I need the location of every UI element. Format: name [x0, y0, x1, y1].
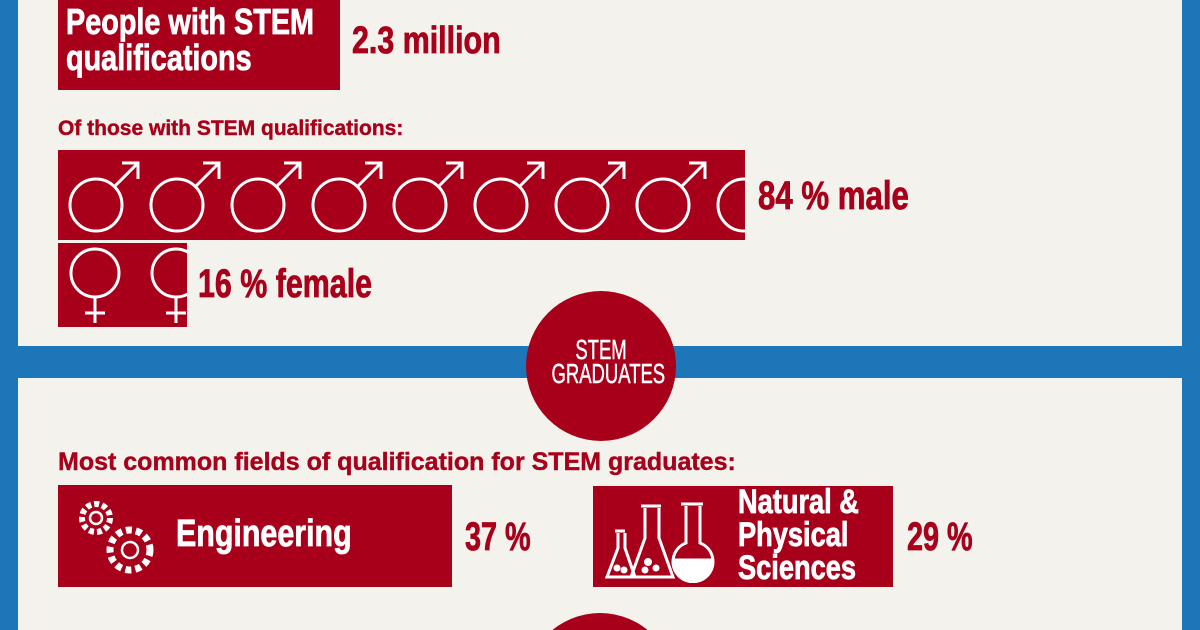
- icon: gears: [79, 501, 154, 574]
- box: people with STEM: qualifications: [66, 37, 252, 78]
- box: engineering: [58, 485, 452, 587]
- box: natural & physical sciences: Natural &: [738, 483, 859, 521]
- icon: flasks: [604, 502, 714, 583]
- badge: bottom circle: [552, 613, 648, 630]
- box: people with STEM: [58, 0, 340, 90]
- stat: 37%: 37 %: [465, 515, 531, 559]
- panel: top: [18, 0, 1182, 346]
- subheading: most common fields: Most common fields of qualification for STEM graduates:: [58, 448, 736, 476]
- badge: STEM graduates: [526, 291, 676, 441]
- subheading: of those: Of those with STEM qualifications:: [58, 117, 403, 140]
- stat: 84% male: 84 % male: [758, 174, 909, 218]
- box: natural & physical sciences: Physical: [738, 516, 848, 554]
- box: natural & physical sciences: Sciences: [738, 549, 856, 587]
- chart: male bar: [58, 150, 745, 240]
- box: people with STEM: People with STEM: [66, 1, 314, 42]
- badge: STEM graduates: GRADUATES: [552, 358, 665, 389]
- chart: female bar: [58, 243, 187, 327]
- badge: STEM graduates: STEM: [575, 334, 627, 365]
- stat: 29%: 29 %: [907, 515, 973, 559]
- stat: 16% female: 16 % female: [198, 262, 372, 306]
- box: natural & physical sciences: [593, 486, 893, 587]
- panel: bottom: [18, 378, 1182, 630]
- stat: 2.3 million: 2.3 million: [352, 20, 501, 62]
- box: engineering: Engineering: [176, 513, 352, 555]
